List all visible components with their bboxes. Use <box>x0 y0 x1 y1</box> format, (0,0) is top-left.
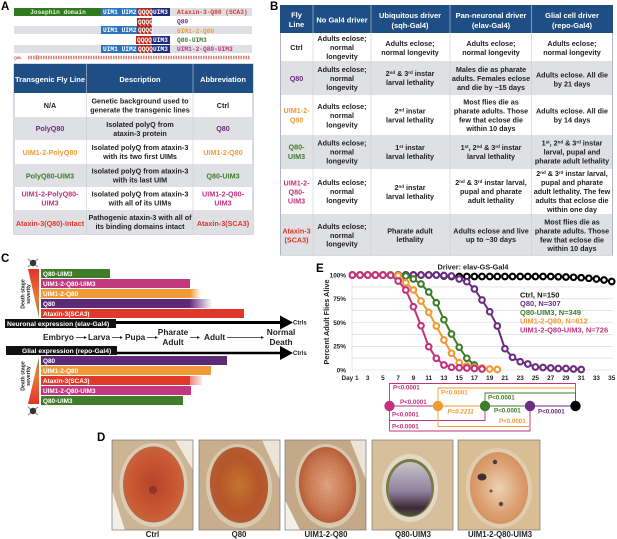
row: Q80-UIM3: UIM3 <box>288 152 305 161</box>
x axis labels: 13 <box>440 375 448 382</box>
row: UIM1-2-PolyQ80-UIM3: UIM3 <box>214 198 232 208</box>
icon: skull top <box>28 259 38 267</box>
chart title: Driver: elav-GS-Gal4 <box>438 262 509 272</box>
row: UIM1-2-PolyQ80-UIM3: UIM1-2-Q80- <box>202 190 245 198</box>
x axis labels: 23 <box>517 375 524 382</box>
developmental stages: Adult <box>204 332 225 342</box>
row: Q80-UIM3: & 3 <box>563 138 576 148</box>
x axis labels: 9 <box>412 375 416 382</box>
developmental stages: Normal <box>267 327 295 337</box>
line: UIM1-2-Q80-UIM3 <box>352 275 482 369</box>
row: UIM1-2-Q80-UIM3: longevity <box>326 196 358 205</box>
row: PolyQ80 <box>36 120 230 138</box>
row: Ataxin-3 (SCA3) <box>282 218 609 253</box>
table header: No Gal4 driver <box>316 16 368 24</box>
row: PolyQ80: ataxin-3 protein <box>113 129 167 138</box>
line: Ctrl <box>352 275 612 282</box>
y axis labels: 75% <box>333 296 346 303</box>
row: PolyQ80-UIM3: with its last UIM <box>112 176 167 184</box>
row: UIM1-2-Q80-UIM3: UIM1-2- <box>284 178 310 188</box>
row: PolyQ80: Isolated polyQ from <box>106 120 174 129</box>
row: Q80: by 21 days <box>554 80 590 88</box>
row: Ataxin-3 intact <box>16 213 250 231</box>
row: Q80-UIM3: & 3 <box>482 143 495 152</box>
row: Ctrl: longevity <box>326 52 358 61</box>
row: UIM1-2-Q80-UIM3: Q80- <box>289 188 305 196</box>
table header <box>289 10 599 30</box>
table: transgenic fly lines <box>14 64 253 234</box>
row: Ataxin-3 (SCA3): within 10 days <box>546 244 597 253</box>
glial expression bars: UIM1-2-Q80 <box>43 368 79 375</box>
x axis labels: Day 1 <box>341 375 359 382</box>
row: UIM1-2-Q80-UIM3: UIM3 <box>288 196 305 206</box>
table header: Transgenic Fly Line <box>15 75 85 84</box>
neuronal expression bars: Q80 <box>43 301 56 308</box>
x axis labels: 7 <box>396 375 400 382</box>
table header: Fly <box>291 10 303 20</box>
neuronal expression bars: Q80-UIM3 <box>43 271 73 278</box>
x axis labels: 25 <box>532 375 539 382</box>
row: Q80: and die by ~15 days <box>457 83 525 92</box>
row: Ataxin-3 (SCA3): Adults eclose; <box>317 222 367 231</box>
panel: B phenotype table <box>270 1 613 255</box>
severity wedge glial: severity <box>26 366 32 386</box>
construct schematic: UIM3 <box>153 37 168 44</box>
severity wedge glial <box>20 357 39 404</box>
arrow: glial expression: Glial expression (repo-Gal4) <box>22 348 111 355</box>
table header <box>15 75 246 84</box>
legend: Ctrl, N=150 <box>520 290 559 300</box>
row: Q80-UIM3: normal <box>330 148 354 156</box>
row: Q80-UIM3: , 2 <box>469 143 477 152</box>
row: UIM1-2-Q80: Adults eclose. All die <box>536 106 608 116</box>
neuronal expression bars <box>41 269 244 318</box>
row: control: generate the transgenic lines <box>90 106 190 114</box>
eye: UIM1-2-Q80-UIM3: UIM1-2-Q80-UIM3 <box>468 530 533 539</box>
row: UIM1-2-Q80: Most flies die as <box>463 98 519 106</box>
construct schematic: UIM1 UIM2 <box>103 9 137 16</box>
row: Ctrl: Adults eclose; <box>547 39 597 48</box>
table header: Abbreviation <box>200 75 246 84</box>
row: PolyQ80-UIM3: PolyQ80-UIM3 <box>26 172 74 180</box>
table header: Pan-neuronal driver <box>456 11 527 20</box>
severity wedge neuronal: Death stage <box>20 279 26 309</box>
y axis labels: 0% <box>337 368 346 374</box>
row: UIM1-2-Q80: instar <box>404 106 426 116</box>
x axis labels <box>341 375 616 382</box>
arrow: neuronal expression: Ctrls <box>293 320 307 326</box>
construct schematic: QQQQ <box>138 27 153 34</box>
statistics bracket diagram: P<0.0001 <box>499 418 526 425</box>
row: Ataxin-3 (SCA3): up to ~30 days <box>466 235 516 244</box>
row: UIM1-2-Q80-UIM3: nd <box>398 184 404 189</box>
row: UIM1-2-Q80: within 10 days <box>465 124 516 133</box>
statistics bracket diagram: P<0.0001 <box>494 408 521 414</box>
row: UIM1-2-Q80: Adults eclose; <box>317 102 367 111</box>
row: UIM1-2-Q80-UIM3: rd <box>478 179 483 184</box>
panel letter D: D <box>97 432 105 444</box>
statistics bracket diagram: P<0.0001 <box>392 424 419 430</box>
row: UIM1-2-Q80-UIM3: 2 <box>455 178 459 187</box>
row: PolyQ80-UIM3: Q80-UIM3 <box>206 172 240 180</box>
row: UIM1-2-Q80: longevity <box>326 120 358 130</box>
construct schematic: QQQQ <box>138 19 153 26</box>
row: Q80-UIM3: st <box>465 144 469 149</box>
row: Q80: Males die as pharate <box>456 65 526 74</box>
panel letter A: A <box>1 1 9 13</box>
row: UIM1-2-Q80: larval lethality <box>386 116 434 124</box>
table header: (repo-Gal4) <box>552 21 592 30</box>
construct schematic: UIM1-2-Q80 <box>177 28 214 35</box>
legend <box>520 290 608 334</box>
panel letter E: E <box>316 263 324 275</box>
panel: C developmental death stage bars <box>1 253 307 415</box>
statistics bracket diagram: P<0.0001 <box>393 384 420 392</box>
polyQ sequence strip <box>14 55 250 60</box>
row: PolyQ80-UIM3 <box>26 166 240 184</box>
y axis labels: 50% <box>333 320 346 327</box>
row: UIM1-2-PolyQ80-UIM3: UIM3 <box>41 198 59 208</box>
eye: Q80-UIM3 <box>372 440 453 539</box>
statistics bracket diagram: P<0.0001 <box>400 399 427 406</box>
row: Q80: rd <box>408 70 413 75</box>
row: Q80: & 3 <box>395 69 408 78</box>
row: Ataxin-3 (SCA3): lethality <box>396 235 424 244</box>
construct schematic: UIM1-2-Q80-UIM3 <box>177 46 233 53</box>
row: UIM1-2-PolyQ80: UIM1-2-PolyQ80 <box>23 148 77 157</box>
row: UIM1-2-PolyQ80-UIM3: Isolated polyQ from ataxin-3 <box>92 190 188 198</box>
x axis labels: 33 <box>593 375 600 382</box>
severity wedge neuronal: severity <box>26 284 32 304</box>
statistics bracket diagram: P<0.0001 <box>538 408 565 416</box>
row: Q80-UIM3: , 2 <box>550 138 558 148</box>
developmental stages: Embryo <box>43 332 74 342</box>
eye: Q80-UIM3: Q80-UIM3 <box>395 530 432 539</box>
construct schematic: QQQQ <box>138 9 153 16</box>
row: UIM1-2-PolyQ80-UIM3: with all of its UIMs <box>108 198 171 208</box>
row: Ataxin-3 (SCA3): (SCA3) <box>285 236 309 244</box>
row: Ctrl: normal <box>330 43 354 52</box>
eye: Ctrl: Ctrl <box>146 530 159 539</box>
row: Ataxin-3 intact: Pathogenic ataxin-3 with all of <box>88 213 192 222</box>
row: UIM1-2-PolyQ80: UIM1-2-Q80 <box>203 148 243 157</box>
row: Q80-UIM3 <box>288 138 609 166</box>
row: Ctrl: normal longevity <box>462 48 520 57</box>
legend: Q80-UIM3, N=349 <box>520 308 581 317</box>
row: UIM1-2-Q80-UIM3: 2 <box>394 183 398 192</box>
legend: UIM1-2-Q80, N=612 <box>520 316 588 326</box>
row: Q80-UIM3: st <box>546 140 550 144</box>
x axis labels: 17 <box>471 375 478 382</box>
row: UIM1-2-PolyQ80-UIM3: UIM1-2-PolyQ80- <box>21 190 79 198</box>
row: Q80-UIM3: longevity <box>326 156 358 166</box>
row: Q80-UIM3: 1 <box>461 143 465 152</box>
statistics bracket diagram: P=0.2211 <box>448 408 474 416</box>
eye: Ctrl <box>112 440 193 539</box>
construct schematic: UIM3 <box>153 9 168 16</box>
row: Q80-UIM3: 1 <box>542 138 546 148</box>
table header: Glial cell driver <box>545 11 599 20</box>
row: Ataxin-3 (SCA3): Adults eclose and live <box>453 226 529 236</box>
row: UIM1-2-Q80: normal <box>330 111 354 120</box>
row: Ctrl: Adults eclose; <box>317 34 367 43</box>
row: Q80: instar <box>413 69 435 78</box>
row: Q80-UIM3: larval lethality <box>467 152 515 161</box>
eye: UIM1-2-Q80-UIM3 <box>458 440 540 539</box>
developmental stages: Pharate <box>158 327 189 337</box>
line: Q80-UIM3 <box>352 275 482 368</box>
row: UIM1-2-Q80-UIM3: Adults eclose; <box>317 178 367 187</box>
glial expression bars: Q80-UIM3 <box>43 398 73 405</box>
neuronal expression bars: UIM1-2-Q80 <box>43 291 79 298</box>
row: UIM1-2-Q80 <box>284 98 608 133</box>
statistics bracket diagram: P<0.0001 <box>441 390 468 396</box>
x axis labels: 27 <box>547 375 555 382</box>
arrow: glial expression: Ctrls <box>293 351 307 357</box>
row: Q80-UIM3: nd <box>558 140 563 144</box>
row: UIM1-2-Q80-UIM3: pupal and pharate <box>541 178 603 187</box>
table header: Description <box>119 75 161 84</box>
x axis labels: 19 <box>486 375 494 382</box>
severity wedge neuronal <box>20 269 39 318</box>
row: UIM1-2-Q80-UIM3: instar <box>404 183 426 192</box>
x axis labels: 11 <box>425 375 433 382</box>
legend: Q80, N=307 <box>520 299 561 308</box>
row: UIM1-2-Q80-UIM3 <box>284 169 611 214</box>
construct schematic: Q80-UIM3 <box>177 37 207 44</box>
panel: D fly eye images <box>97 432 540 539</box>
row: Ataxin-3 intact: its binding domains intact <box>95 222 185 231</box>
x axis labels: 3 <box>366 375 370 382</box>
severity wedge glial: Death stage <box>20 361 26 391</box>
panel letter B: B <box>270 1 278 13</box>
row: UIM1-2-Q80-UIM3: & 3 <box>546 169 559 178</box>
row: Q80-UIM3: instar <box>581 138 603 148</box>
row: Ctrl: Adults eclose; <box>385 39 435 48</box>
row: UIM1-2-PolyQ80: with its two first UIMs <box>102 152 177 161</box>
line: Q80 <box>352 275 581 370</box>
y axis labels <box>322 272 346 374</box>
table header: Ubiquitous driver <box>379 11 441 20</box>
x axis labels: 31 <box>578 375 585 382</box>
developmental stages: Adult <box>162 337 184 347</box>
x axis labels: 21 <box>501 375 509 382</box>
row: Q80-UIM3: 1 <box>395 143 399 152</box>
row: Ataxin-3 intact: Ataxin-3(SCA3) <box>197 219 250 228</box>
y axis labels: 25% <box>333 344 346 350</box>
neuronal expression bars: Ataxin-3(SCA3) <box>43 311 90 318</box>
row: Ctrl: Ctrl <box>290 43 303 52</box>
row: UIM1-2-Q80: few that eclose die <box>459 116 523 124</box>
row: Q80-UIM3: instar <box>403 143 425 152</box>
row: PolyQ80-UIM3: Isolated polyQ from ataxin-3 <box>92 166 188 176</box>
row: Ataxin-3 (SCA3): normal <box>330 231 354 240</box>
construct schematic: Josephin domain <box>30 9 86 16</box>
row: Q80 <box>290 65 608 92</box>
construct schematic: UIM3 <box>153 46 168 53</box>
table header: (sqh-Gal4) <box>391 21 429 30</box>
row: UIM1-2-Q80: 2 <box>394 106 398 116</box>
eye: Q80 <box>199 440 280 539</box>
row: Q80-UIM3: Adults eclose; <box>317 138 367 148</box>
statistics bracket diagram <box>384 384 581 431</box>
row: UIM1-2-Q80-UIM3: 2 <box>536 169 540 178</box>
row: Q80: adults. Females eclose <box>452 74 530 83</box>
polyQ sequence strip: Q80- <box>14 56 23 60</box>
row: Ctrl: normal longevity <box>381 48 439 57</box>
arrow: neuronal expression <box>5 316 307 330</box>
row: UIM1-2-Q80-UIM3: pupal and pharate <box>460 187 522 196</box>
arrow: neuronal expression: Neuronal expression (elav-Gal4) <box>7 321 109 328</box>
row: control <box>44 96 229 114</box>
icon: skull bottom <box>28 407 38 415</box>
row: UIM1-2-Q80-UIM3: adults that eclose die <box>535 196 609 205</box>
neuronal expression bars: UIM1-2-Q80-UIM3 <box>43 281 96 288</box>
row: Ataxin-3 intact: Ataxin-3(Q80)-Intact <box>16 219 85 228</box>
row: Ataxin-3 (SCA3): longevity <box>326 240 358 248</box>
row: Q80: Q80 <box>290 74 303 83</box>
x axis labels: 35 <box>608 375 616 382</box>
table header: Line <box>289 20 304 29</box>
row: Q80-UIM3: st <box>399 144 404 149</box>
statistics bracket diagram: P<0.0001 <box>488 394 515 402</box>
row: UIM1-2-PolyQ80-UIM3 <box>21 190 245 208</box>
row: Q80: Adults eclose; <box>317 65 367 74</box>
panel: E survival chart <box>316 262 616 431</box>
row: PolyQ80: Q80 <box>216 124 230 133</box>
y axis labels: Percent Adult Flies Alive <box>322 279 331 365</box>
arrow: glial expression <box>6 346 307 360</box>
row: UIM1-2-Q80-UIM3: nd <box>459 179 465 184</box>
row: Ctrl: Adults eclose; <box>466 39 516 48</box>
legend: UIM1-2-Q80-UIM3, N=726 <box>520 326 608 334</box>
row: UIM1-2-Q80: pharate adults. Those <box>454 106 528 116</box>
row: Q80-UIM3: rd <box>495 144 500 149</box>
row: Ataxin-3 (SCA3): Ataxin-3 <box>282 226 311 236</box>
row: PolyQ80: PolyQ80 <box>36 124 64 133</box>
row: Q80: longevity <box>326 83 358 92</box>
row: UIM1-2-Q80-UIM3: instar larval, <box>482 178 527 187</box>
row: Ctrl: normal longevity <box>543 48 601 57</box>
row: UIM1-2-Q80-UIM3: rd <box>559 170 564 175</box>
line: UIM1-2-Q80 <box>352 275 497 370</box>
panel: A construct diagram and transgenic line table <box>1 1 253 234</box>
row: Q80-UIM3: pharate adult lethality <box>535 156 609 166</box>
y axis labels: 100% <box>330 272 346 280</box>
row: control: Genetic background used to <box>91 96 189 106</box>
row: Q80-UIM3: larval, pupal and <box>544 148 600 156</box>
row: Q80-UIM3: rd <box>576 140 581 144</box>
developmental stages: Larva <box>88 332 111 342</box>
x axis labels: 15 <box>456 375 463 382</box>
row: UIM1-2-Q80-UIM3: within one day <box>546 205 597 214</box>
row: UIM1-2-Q80: UIM1-2- <box>284 106 310 115</box>
glial expression bars: Q80 <box>43 358 56 365</box>
row: UIM1-2-Q80: by 14 days <box>554 116 590 124</box>
glial expression bars <box>41 356 227 405</box>
row: Q80-UIM3: larval lethality <box>386 152 434 161</box>
construct schematic: Ataxin-3-Q80 (SCA3) <box>177 9 248 16</box>
row: Q80-UIM3: instar <box>500 143 522 152</box>
glial expression bars: UIM1-2-Q80-UIM3 <box>43 388 96 395</box>
row: Q80: nd <box>390 70 395 75</box>
table header: (elav-Gal4) <box>472 21 511 30</box>
row: UIM1-2-Q80-UIM3: instar larval, <box>563 169 608 178</box>
eye: Q80: Q80 <box>232 530 247 539</box>
construct schematic: QQQQ <box>137 37 152 44</box>
x axis labels: 5 <box>381 375 385 382</box>
statistics bracket diagram: P<0.0001 <box>392 412 419 418</box>
developmental stages <box>43 327 295 347</box>
row: Ataxin-3 (SCA3): Pharate adult <box>387 226 433 236</box>
row: UIM1-2-Q80-UIM3: larval lethality <box>386 192 434 201</box>
row: Q80-UIM3: nd <box>477 144 482 149</box>
row: Q80: normal <box>330 74 354 83</box>
x axis labels: 29 <box>562 375 570 382</box>
eye: UIM1-2-Q80: UIM1-2-Q80 <box>305 530 348 539</box>
row: control: N/A <box>44 101 56 110</box>
row: UIM1-2-Q80: nd <box>398 108 404 112</box>
developmental stages: Pupa <box>125 332 146 342</box>
row: UIM1-2-Q80-UIM3: & 3 <box>465 178 478 187</box>
grid lines <box>352 275 613 370</box>
row: UIM1-2-Q80: Q80 <box>290 116 303 124</box>
developmental stages: Death <box>269 337 293 347</box>
construct schematic: QQQQ <box>138 46 153 53</box>
row: Q80-UIM3: Q80- <box>289 142 305 152</box>
row: UIM1-2-PolyQ80 <box>23 143 243 161</box>
row: Ataxin-3 (SCA3): Most flies die as <box>544 218 600 226</box>
construct schematic: UIM1 UIM2 <box>103 27 137 34</box>
row: UIM1-2-Q80-UIM3: adult lethality <box>468 196 514 205</box>
row: UIM1-2-Q80-UIM3: normal <box>330 187 354 196</box>
row: UIM1-2-PolyQ80: Isolated polyQ from ataxin-3 <box>92 143 188 152</box>
row: Ctrl <box>290 34 601 61</box>
row: Q80: 2 <box>386 69 390 78</box>
row: Q80: larval lethality <box>386 78 434 87</box>
row: UIM1-2-Q80-UIM3: adult lethality. The few <box>534 187 611 196</box>
glial expression bars: Ataxin-3(SCA3) <box>43 378 90 385</box>
panel letter C: C <box>1 253 9 265</box>
construct schematic: UIM1 UIM2 <box>103 46 137 53</box>
row: Ataxin-3 (SCA3): pharate adults. Those <box>535 226 609 236</box>
row: Ataxin-3 (SCA3): few that eclose die <box>540 236 604 244</box>
row: control: Ctrl <box>217 101 229 110</box>
construct schematic: Q80 <box>177 18 188 26</box>
eye: UIM1-2-Q80 <box>285 440 366 539</box>
construct schematic <box>14 8 252 53</box>
row: Q80: Adults eclose. All die <box>536 70 608 80</box>
row: UIM1-2-Q80-UIM3: nd <box>540 170 546 175</box>
